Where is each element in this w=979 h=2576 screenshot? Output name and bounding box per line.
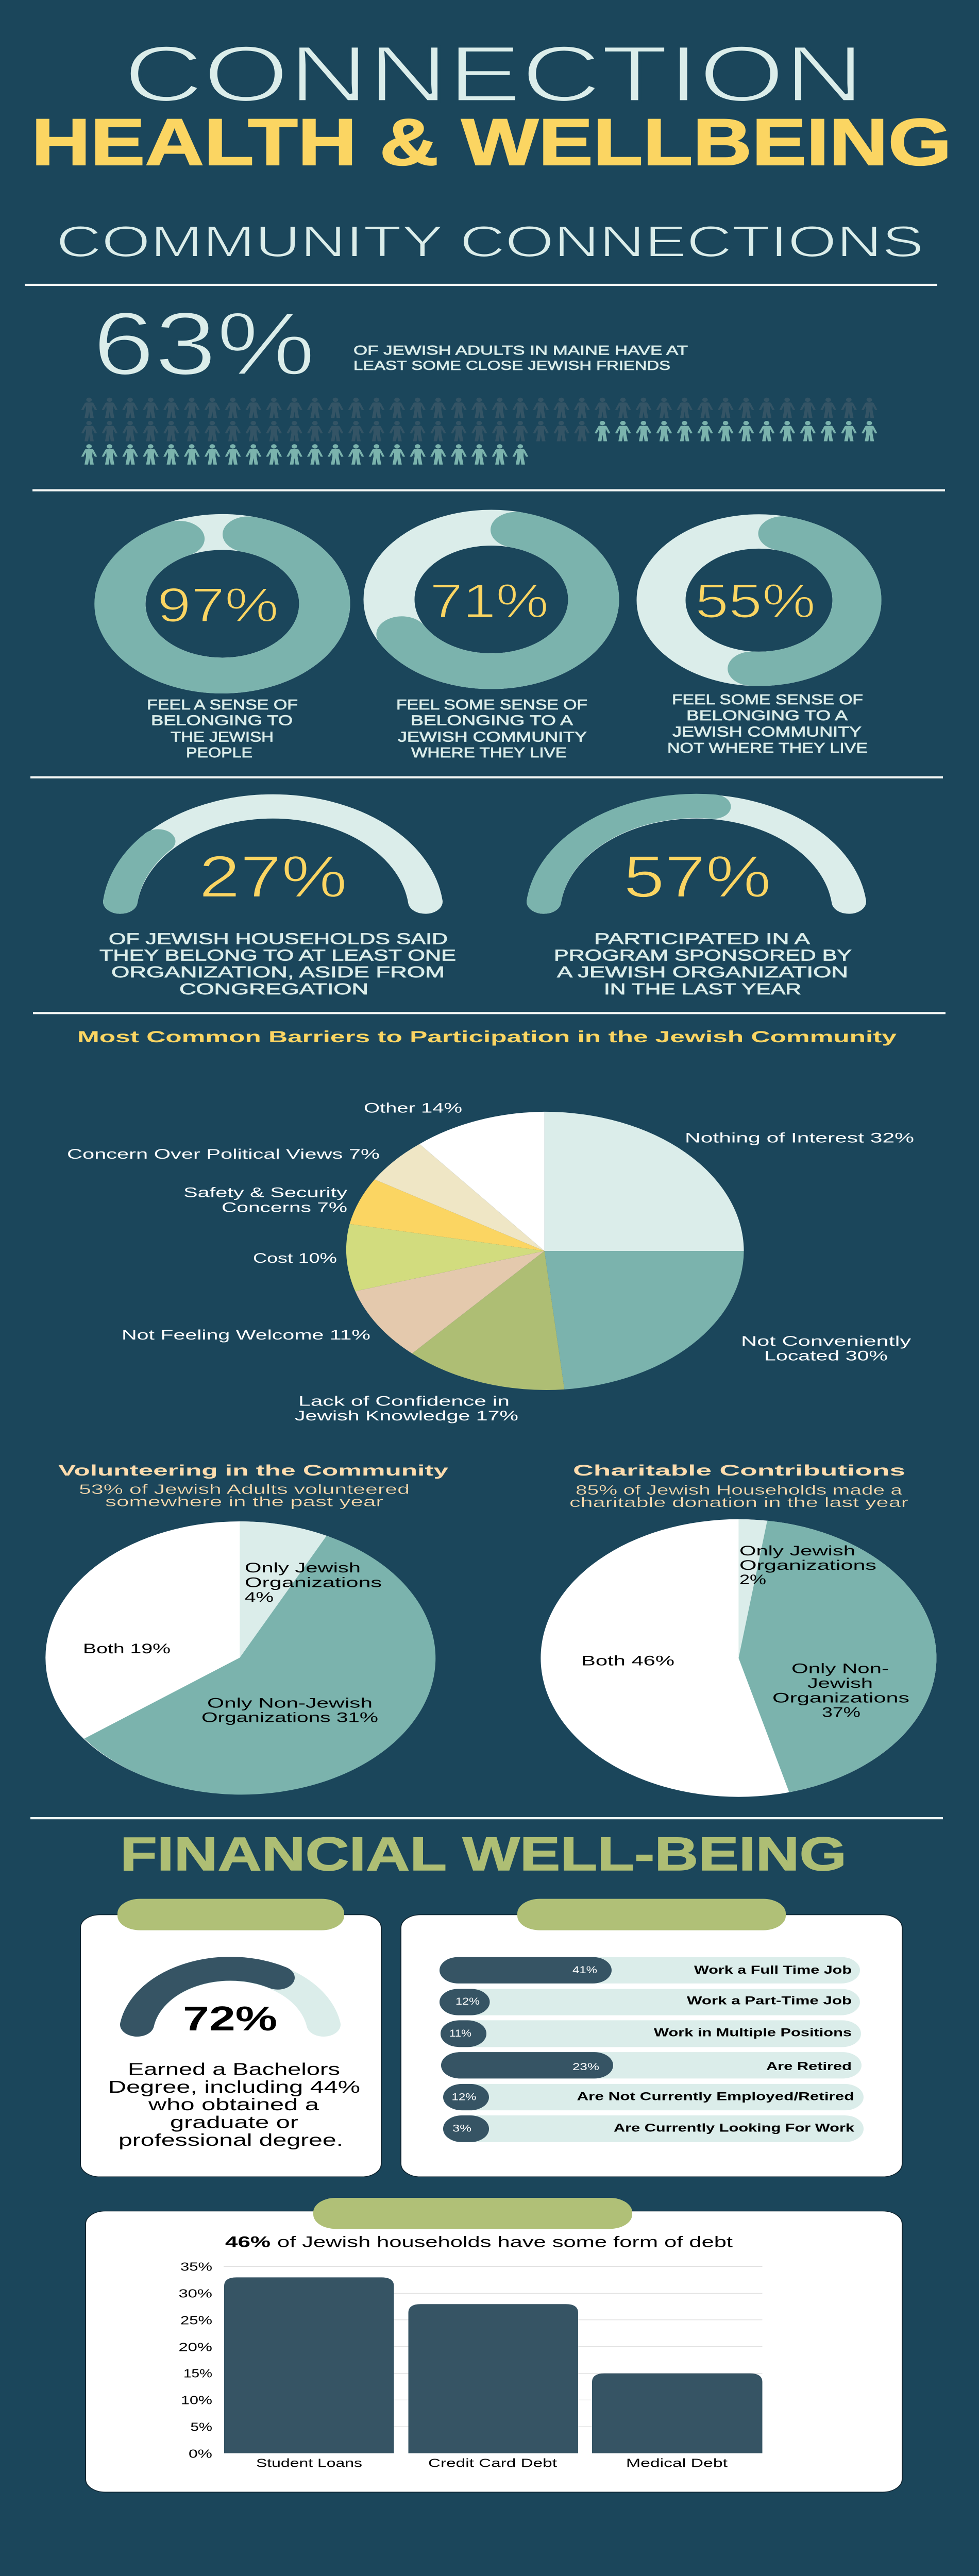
panel: debt (86, 2198, 902, 2492)
charitable labels: Only Non- (791, 1660, 889, 1676)
heading: volunteering (58, 1462, 448, 1509)
donut label: not where they live (667, 692, 868, 756)
donut label: not where they live: NOT WHERE THEY LIVE (667, 740, 868, 756)
pie labels: Not Feeling Welcome 11% (122, 1327, 370, 1343)
debt heading: 46% (225, 2233, 271, 2250)
bar: not employed: Are Not Currently Employed/Retired (577, 2090, 854, 2103)
pie labels: Lack of Confidence in (298, 1393, 510, 1409)
x axis labels: Credit Card Debt (428, 2456, 557, 2470)
arch label: program participation: A JEWISH ORGANIZATION (557, 963, 848, 980)
donut label: where they live: FEEL SOME SENSE OF (396, 697, 587, 713)
y axis labels: 15% (183, 2367, 212, 2380)
donut label: jewish people: PEOPLE (186, 745, 252, 761)
volunteering labels: Organizations (245, 1574, 382, 1590)
charitable labels: Organizations (772, 1690, 909, 1705)
y axis labels: 0% (189, 2447, 212, 2461)
pie labels: Not Conveniently (741, 1333, 912, 1349)
bar: multiple positions (441, 2020, 861, 2047)
volunteering labels: Organizations 31% (201, 1709, 378, 1725)
pie labels: Other 14% (364, 1100, 462, 1115)
x axis labels (256, 2456, 728, 2470)
heading: charitable contributions: 85% of Jewish Households made a (576, 1482, 902, 1498)
charitable labels: Jewish (807, 1675, 873, 1690)
heading: charitable contributions: charitable donation in the last year (569, 1495, 908, 1510)
education description: graduate or (170, 2112, 298, 2132)
donut label: jewish people: THE JEWISH (171, 729, 274, 745)
volunteering labels: Only Jewish (245, 1560, 361, 1575)
arch label: program participation (554, 930, 852, 997)
donut: 97 percent: 97% (157, 579, 279, 632)
donut label: not where they live: BELONGING TO A (686, 708, 848, 723)
donut label: where they live: WHERE THEY LIVE (411, 745, 567, 761)
stat: 63 percent close friends (93, 294, 688, 394)
bar: looking for work: 3% (452, 2123, 471, 2134)
arch label: organization membership: ORGANIZATION, ASIDE FROM (111, 963, 445, 980)
pie labels: Concerns 7% (222, 1199, 347, 1215)
education description: Degree, including 44% (108, 2077, 360, 2096)
education description (108, 2059, 360, 2149)
gauge: 72 percent (137, 1969, 324, 2038)
heading: financial well-being: FINANCIAL WELL-BEING (120, 1827, 847, 1880)
heading: charitable contributions (569, 1462, 908, 1510)
donut label: jewish people: BELONGING TO (151, 713, 293, 728)
stat description (353, 343, 688, 373)
bar: looking for work: Are Currently Looking For Work (614, 2122, 854, 2134)
volunteering labels: Only Non-Jewish (207, 1695, 373, 1710)
panel: education (80, 1899, 381, 2177)
x axis labels: Student Loans (256, 2456, 362, 2470)
donut label: where they live: BELONGING TO A (411, 713, 573, 728)
gauge: 72 percent: 72% (183, 2000, 277, 2038)
volunteering labels (83, 1560, 382, 1725)
y axis labels: 25% (180, 2314, 212, 2327)
pictogram: 100 people, 63 highlighted (81, 398, 877, 465)
pie labels: Safety & Security (183, 1184, 348, 1200)
y axis labels: 5% (191, 2420, 212, 2434)
bar: part time: 12% (455, 1996, 480, 2007)
arch label: organization membership: CONGREGATION (179, 980, 368, 997)
donut: 71 percent (389, 528, 594, 671)
title: connection: CONNECTION (124, 30, 864, 118)
donut label: not where they live: JEWISH COMMUNITY (672, 724, 862, 740)
pie labels (67, 1100, 914, 1423)
y axis labels (178, 2260, 212, 2461)
heading: barriers: Most Common Barriers to Participation in the Jewish Community (77, 1028, 897, 1046)
education description: who obtained a (148, 2095, 319, 2114)
charitable labels (581, 1543, 909, 1720)
arch gauge: 27 percent (121, 806, 426, 910)
bar chart: debt types (178, 2260, 763, 2470)
pie chart: barriers (67, 1100, 914, 1423)
arch label: organization membership: THEY BELONG TO AT LEAST ONE (99, 946, 456, 964)
heading: community connections: COMMUNITY CONNECTIONS (56, 217, 924, 266)
bar: full time (440, 1957, 860, 1984)
heading: volunteering: somewhere in the past year (105, 1494, 383, 1509)
donut label: not where they live: FEEL SOME SENSE OF (672, 692, 863, 708)
donut: 55 percent (661, 532, 857, 669)
heading: volunteering: Volunteering in the Community (58, 1462, 448, 1479)
pie chart: volunteering (45, 1521, 435, 1794)
bar: not employed (443, 2084, 864, 2110)
pie labels: Concern Over Political Views 7% (67, 1146, 380, 1162)
bar: not employed: 12% (452, 2091, 477, 2103)
arch label: program participation: IN THE LAST YEAR (604, 980, 801, 997)
bar: looking for work (443, 2115, 864, 2142)
stat description: LEAST SOME CLOSE JEWISH FRIENDS (353, 358, 670, 373)
bar: full time: Work a Full Time Job (694, 1963, 852, 1976)
heading: volunteering: 53% of Jewish Adults volunteered (79, 1482, 410, 1497)
arch label: organization membership: OF JEWISH HOUSEHOLDS SAID (109, 930, 448, 947)
donut label: jewish people (147, 697, 298, 761)
charitable labels: Only Jewish (739, 1543, 855, 1558)
bar: retired: 23% (572, 2061, 599, 2072)
pie labels: Cost 10% (253, 1250, 337, 1266)
charitable labels: Organizations (739, 1557, 876, 1573)
y axis labels: 20% (178, 2341, 212, 2354)
bars (224, 2277, 763, 2453)
bar: part time (440, 1989, 860, 2015)
bar: full time: 41% (572, 1964, 597, 1975)
pie labels: Jewish Knowledge 17% (295, 1408, 518, 1423)
arch label: program participation: PROGRAM SPONSORED BY (554, 946, 852, 964)
y axis labels: 35% (180, 2260, 212, 2274)
education description: Earned a Bachelors (128, 2059, 340, 2079)
donut label: where they live (396, 697, 587, 761)
bar: multiple positions: 11% (449, 2028, 471, 2039)
bar: part time: Work a Part-Time Job (687, 1994, 852, 2007)
arch gauge: 57 percent (544, 806, 849, 910)
pie chart: charitable contributions (541, 1519, 936, 1797)
charitable labels: 37% (822, 1704, 860, 1720)
charitable labels: 2% (739, 1572, 766, 1587)
bar: retired: Are Retired (766, 2060, 852, 2073)
bar: multiple positions: Work in Multiple Positions (654, 2026, 852, 2039)
arch label: organization membership (99, 930, 456, 997)
arch label: program participation: PARTICIPATED IN A (594, 930, 810, 947)
donut: 55 percent: 55% (695, 574, 816, 628)
x axis labels: Medical Debt (626, 2456, 728, 2470)
donut label: jewish people: FEEL A SENSE OF (147, 697, 298, 713)
debt heading: of Jewish households have some form of debt (277, 2233, 733, 2250)
y axis labels: 10% (181, 2394, 212, 2407)
heading: charitable contributions: Charitable Contributions (573, 1462, 905, 1479)
arch gauge: 57 percent: 57% (623, 844, 771, 910)
volunteering labels: Both 19% (83, 1641, 171, 1656)
stat description: OF JEWISH ADULTS IN MAINE HAVE AT (353, 343, 688, 358)
donut: 97 percent (120, 532, 325, 675)
charitable labels: Both 46% (581, 1653, 674, 1668)
bar: retired (441, 2052, 862, 2078)
pie labels: Nothing of Interest 32% (685, 1130, 914, 1145)
big number: 63% (93, 294, 315, 394)
donut: 71 percent: 71% (430, 574, 549, 628)
volunteering labels: 4% (245, 1589, 274, 1604)
donut label: where they live: JEWISH COMMUNITY (398, 729, 587, 745)
panel: employment (401, 1899, 902, 2177)
pie labels: Located 30% (764, 1348, 888, 1363)
y axis labels: 30% (178, 2287, 212, 2300)
education description: professional degree. (119, 2130, 343, 2149)
arch gauge: 27 percent: 27% (199, 844, 347, 910)
